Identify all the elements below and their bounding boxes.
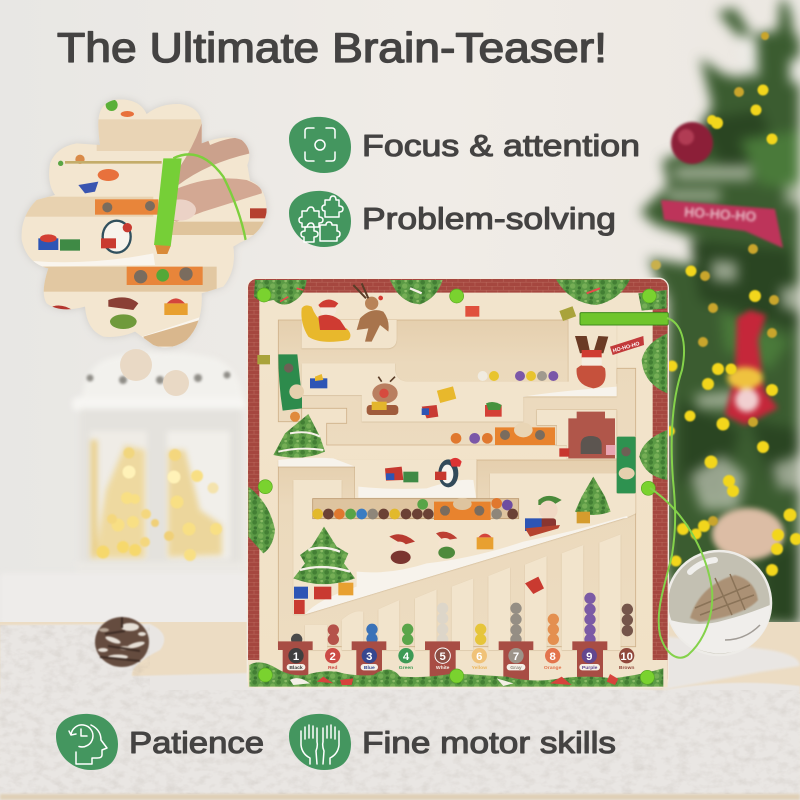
text: patience: Patience <box>129 725 264 760</box>
ornament: red ball <box>671 122 713 164</box>
color name labels: Black <box>289 665 303 671</box>
benefit: fine motor skills <box>289 714 616 770</box>
green magnetic pen cord <box>650 318 712 658</box>
right green slider <box>617 437 636 493</box>
color number badges: 9 <box>586 651 592 663</box>
blurred Christmas tree <box>640 0 800 625</box>
text: focus and attention: Focus & attention <box>362 128 640 163</box>
color name labels: Yellow <box>472 665 487 671</box>
sticker: left tree <box>273 414 325 458</box>
panel: santa tier <box>302 320 617 422</box>
ornament: ho-ho-ho banner <box>661 200 783 248</box>
magnetic pegs <box>257 288 656 684</box>
lantern bokeh lights <box>96 448 222 561</box>
chimneys <box>278 641 607 683</box>
thought bubble photo <box>20 90 273 357</box>
top slider <box>580 313 668 325</box>
sticker: upside-down santa <box>575 336 644 388</box>
panel: sleigh <box>302 320 397 348</box>
garland: right upper <box>642 333 667 393</box>
color name labels: Green <box>399 665 413 671</box>
color number badges: 2 <box>330 651 336 663</box>
benefit: patience <box>56 714 264 770</box>
text: fine motor skills: Fine motor skills <box>362 725 616 760</box>
garland: top left <box>254 280 307 305</box>
color name labels: White <box>436 665 450 671</box>
ornament: pale pumpkin <box>712 508 784 560</box>
color name labels: Brown <box>619 665 634 671</box>
lantern roof vents <box>86 372 230 384</box>
fingers in photo <box>178 123 250 185</box>
sticker: fireplace <box>559 412 615 458</box>
wall gaps between branches <box>740 0 800 84</box>
beads: top tier <box>290 371 558 422</box>
color number badges: 5 <box>440 651 446 663</box>
comb teeth <box>305 534 621 650</box>
orange slider upper <box>495 423 555 445</box>
sticker: gifts row upper <box>257 306 576 418</box>
bubble soft shadow <box>22 99 267 347</box>
garland: left <box>248 487 275 553</box>
thought bubble small circles <box>120 349 189 396</box>
text: problem-solving: Problem-solving <box>362 201 616 236</box>
color number badges: 10 <box>620 651 633 663</box>
garland: bottom <box>249 662 663 687</box>
color number badges: 1 <box>293 651 299 663</box>
beads: middle tier <box>451 433 493 444</box>
sticker: santa sleigh <box>301 283 389 342</box>
icon: head with clock <box>56 714 118 770</box>
color name labels <box>287 664 634 671</box>
color number badges: 3 <box>366 651 372 663</box>
panel: left tree tier <box>293 473 636 614</box>
garland: top right <box>556 279 630 305</box>
left green slider <box>278 354 304 411</box>
color name labels: Gray <box>510 665 522 671</box>
panel: fireplace tier <box>537 410 617 458</box>
pen barrel in photo <box>154 158 182 247</box>
benefit: focus and attention <box>289 117 640 173</box>
bead trough <box>313 499 519 519</box>
sticker: gifts and penguin <box>385 458 462 487</box>
garland: corner top right <box>638 290 667 311</box>
color number badges: 7 <box>513 651 519 663</box>
sticker: upside-down santa: HO-HO-HO <box>612 341 640 354</box>
garland: right lower <box>639 430 667 480</box>
color number badges: 4 <box>403 651 410 663</box>
beads: lower trough <box>312 498 518 519</box>
garland: top middle <box>390 280 443 304</box>
color name labels: Purple <box>582 665 598 671</box>
color number badges: 6 <box>476 651 482 663</box>
sticker: sled elf and tree right <box>525 477 611 537</box>
bokeh lights <box>651 32 800 576</box>
stickers in photo <box>38 99 267 329</box>
maze channel: upper <box>278 320 636 493</box>
ornament: red stocking <box>725 310 778 425</box>
color name labels: Orange <box>544 665 562 671</box>
color number badges: 8 <box>550 651 556 663</box>
pine cone <box>95 617 149 667</box>
color number badges <box>288 648 634 663</box>
title: The Ultimate Brain-Teaser! <box>57 24 607 71</box>
pen cord in photo <box>173 154 246 240</box>
beads: sorted columns <box>291 593 633 645</box>
maze channel: lower <box>278 460 636 647</box>
panel: penguin tier <box>278 460 477 498</box>
bubble clover photo clip <box>22 100 266 348</box>
orange slider lower <box>434 498 491 520</box>
glass snow globe <box>667 551 771 655</box>
bead row in photo <box>58 155 162 166</box>
board brick frame <box>247 278 668 688</box>
ornament: ho-ho-ho banner: HO-HO-HO <box>684 204 757 225</box>
sticker: reindeer on cart <box>367 377 398 415</box>
snow drifts <box>278 387 628 614</box>
maze board <box>247 278 668 688</box>
table and soft snow <box>0 573 800 800</box>
icon: focus frame <box>289 117 351 173</box>
blurred lantern <box>72 352 245 576</box>
orange sliders in photo <box>95 199 203 285</box>
icon: open hands <box>289 714 351 770</box>
color name labels: Blue <box>364 665 375 671</box>
color name labels: Red <box>328 665 337 671</box>
sticker: big tree <box>293 527 355 614</box>
icon: puzzle pieces <box>289 191 351 247</box>
lantern warm glow <box>91 440 222 558</box>
benefit: problem-solving <box>289 191 616 247</box>
sticker: elves on slope <box>389 532 544 594</box>
